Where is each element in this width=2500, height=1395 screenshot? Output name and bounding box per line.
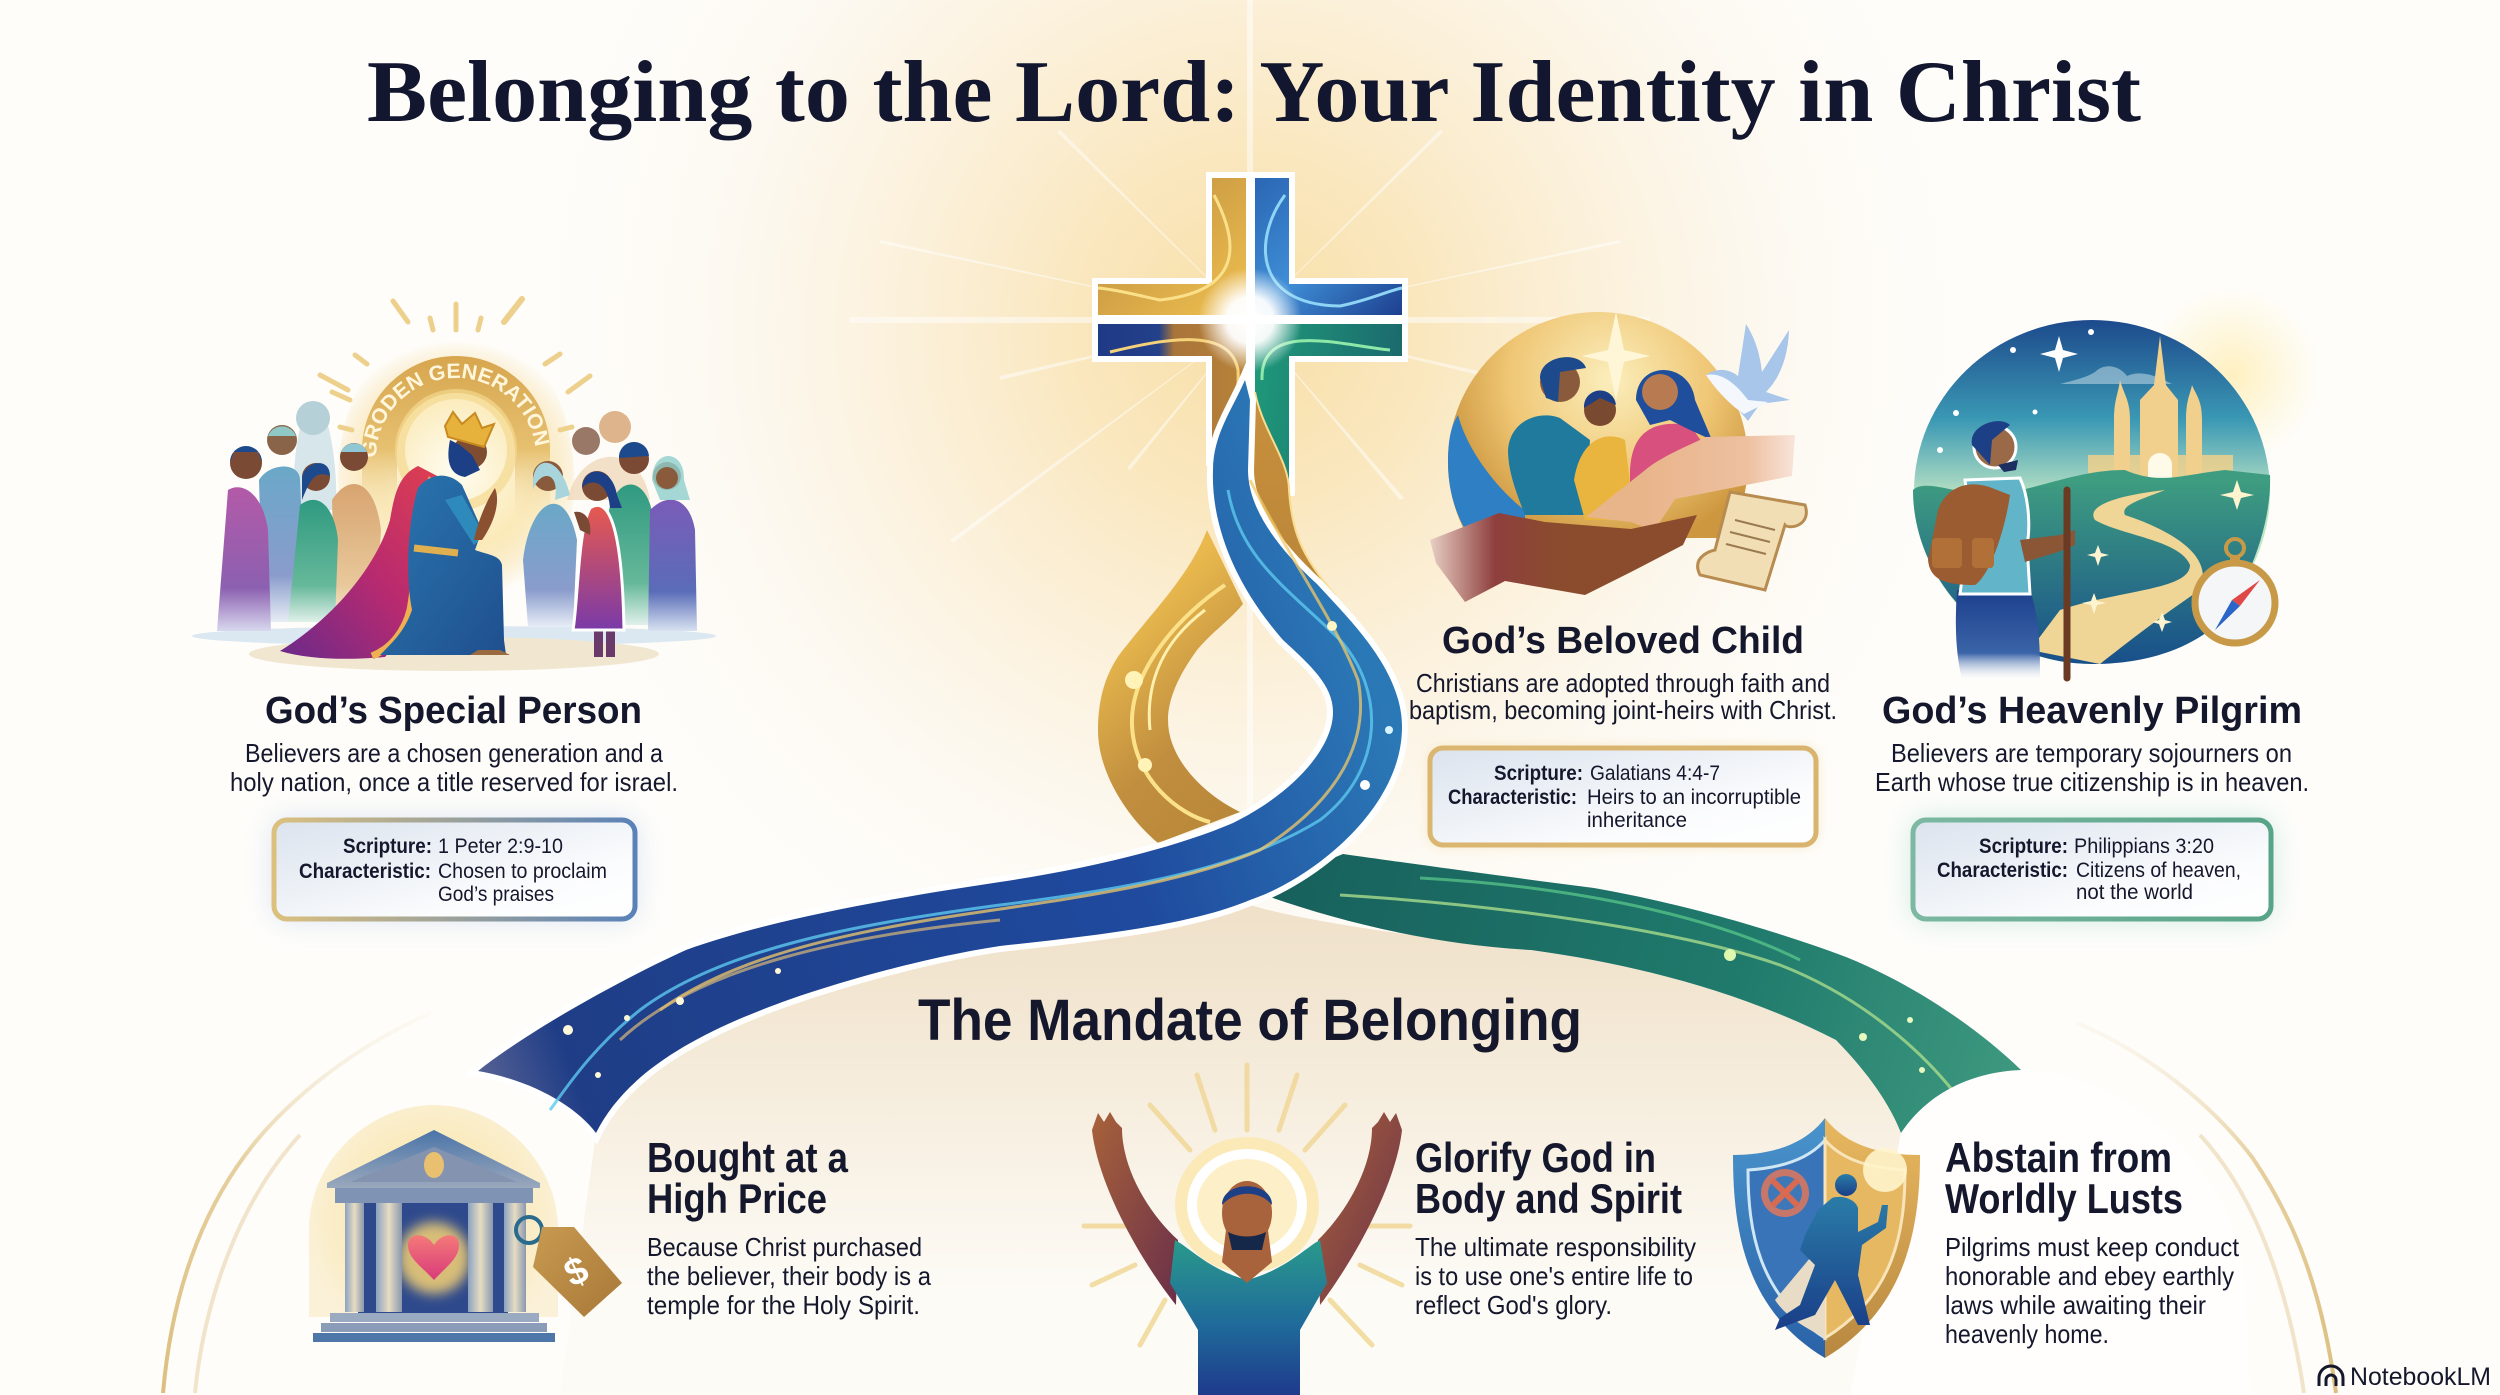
description: Pilgrims must keep conduct xyxy=(1945,1232,2240,1262)
upper hand xyxy=(1586,435,1795,531)
description: Because Christ purchased xyxy=(647,1232,922,1262)
description xyxy=(230,738,678,797)
pilgrim xyxy=(1956,590,2040,680)
item: Glorify God in Body and Spirit xyxy=(1084,1065,1696,1395)
panel: mandate hill background xyxy=(163,905,2336,1395)
NotebookLM watermark: NotebookLM xyxy=(2350,1363,2491,1391)
ribbon: blue strand and left band xyxy=(478,380,1402,1133)
scripture box: not the world xyxy=(2076,881,2193,904)
description: The ultimate responsibility xyxy=(1415,1232,1696,1262)
heading xyxy=(647,1134,849,1222)
description xyxy=(1409,668,1837,725)
scripture box: God’s praises xyxy=(438,883,554,906)
lower hand xyxy=(1430,513,1697,602)
ribbon: gold loop xyxy=(1098,530,1243,843)
scripture box: inheritance xyxy=(1587,809,1687,832)
crowd figures left xyxy=(217,401,381,631)
icon: person with raised arms and halo xyxy=(1084,1065,1410,1395)
heading: High Price xyxy=(647,1175,827,1222)
scripture box xyxy=(272,818,637,921)
heading: The Mandate of Belonging: The Mandate of Belonging xyxy=(918,988,1582,1053)
heading: Abstain from xyxy=(1945,1134,2172,1181)
heading: Worldly Lusts xyxy=(1945,1175,2183,1222)
cross xyxy=(1098,178,1402,490)
heading: Body and Spirit xyxy=(1415,1175,1682,1222)
white lobe behind right item xyxy=(1850,1070,2250,1395)
illustration: kneeling king and crowd xyxy=(192,296,716,671)
description xyxy=(1875,738,2309,797)
title: Belonging to the Lord: Your Identity in Christ xyxy=(367,44,2141,141)
heading xyxy=(1415,1134,1682,1222)
item: Bought at a High Price xyxy=(309,1105,931,1342)
scripture box xyxy=(1428,746,1818,847)
scripture box: Galatians 4:4-7 xyxy=(1590,762,1720,785)
scripture box xyxy=(1911,818,2273,921)
heading: Glorify God in xyxy=(1415,1134,1656,1181)
description: reflect God's glory. xyxy=(1415,1290,1612,1320)
scripture box: Scripture: xyxy=(1494,762,1583,785)
panel: God's Beloved Child xyxy=(1409,312,1837,847)
panel: God's Heavenly Pilgrim xyxy=(1875,320,2309,921)
child xyxy=(1574,436,1632,520)
description: holy nation, once a title reserved for israel. xyxy=(230,767,678,797)
compass xyxy=(2195,563,2275,643)
crowd figures right xyxy=(523,411,697,657)
description: laws while awaiting their xyxy=(1945,1290,2206,1320)
scripture box: Characteristic: xyxy=(1448,786,1577,809)
scripture box: Heirs to an incorruptible xyxy=(1587,786,1801,809)
scripture box: Scripture: xyxy=(1979,835,2068,858)
description: heavenly home. xyxy=(1945,1319,2109,1349)
description: honorable and ebey earthly xyxy=(1945,1261,2234,1291)
scroll xyxy=(1698,492,1806,590)
mother xyxy=(1630,424,1704,490)
ribbon: green band xyxy=(1267,854,2021,1133)
scripture box: Characteristic: xyxy=(299,860,431,883)
illustration: pilgrim, celestial city, compass xyxy=(1913,320,2275,680)
icon: shield with runner xyxy=(1733,1118,1920,1358)
dove xyxy=(1706,324,1790,421)
item: Abstain from Worldly Lusts xyxy=(1733,1070,2250,1395)
heading xyxy=(1945,1134,2183,1222)
description xyxy=(1415,1232,1696,1320)
heading: Bought at a xyxy=(647,1134,849,1181)
king xyxy=(280,412,510,659)
description xyxy=(647,1232,931,1320)
description: Believers are temporary sojourners on xyxy=(1891,738,2292,768)
description: is to use one's entire life to xyxy=(1415,1261,1693,1291)
scripture box: Characteristic: xyxy=(1937,859,2068,882)
scripture box: Chosen to proclaim xyxy=(438,860,607,883)
icon: temple with heart and price tag xyxy=(309,1105,622,1342)
heading: God’s Special Person xyxy=(265,690,642,732)
illustration: family, hands, dove, scroll xyxy=(1430,312,1806,612)
scripture box: Scripture: xyxy=(343,835,432,858)
panel: God's Special Person xyxy=(192,296,716,931)
heading: God’s Heavenly Pilgrim xyxy=(1882,690,2302,732)
scripture box: Citizens of heaven, xyxy=(2076,859,2241,882)
ribbon: upper gold strand xyxy=(1240,392,1335,610)
arc banner text: GRODEN GENERATION xyxy=(362,364,550,457)
description: Believers are a chosen generation and a xyxy=(245,738,663,768)
scripture box: 1 Peter 2:9-10 xyxy=(438,835,563,858)
father xyxy=(1508,415,1590,515)
description: temple for the Holy Spirit. xyxy=(647,1290,920,1320)
heading: God’s Beloved Child xyxy=(1442,620,1804,662)
description xyxy=(1945,1232,2240,1349)
description: baptism, becoming joint-heirs with Christ. xyxy=(1409,695,1837,725)
icon: temple with heart and price tag: $ xyxy=(558,1249,595,1296)
description: Earth whose true citizenship is in heaven. xyxy=(1875,767,2309,797)
description: Christians are adopted through faith and xyxy=(1416,668,1830,698)
description: the believer, their body is a xyxy=(647,1261,931,1291)
scripture box: Philippians 3:20 xyxy=(2074,835,2214,858)
